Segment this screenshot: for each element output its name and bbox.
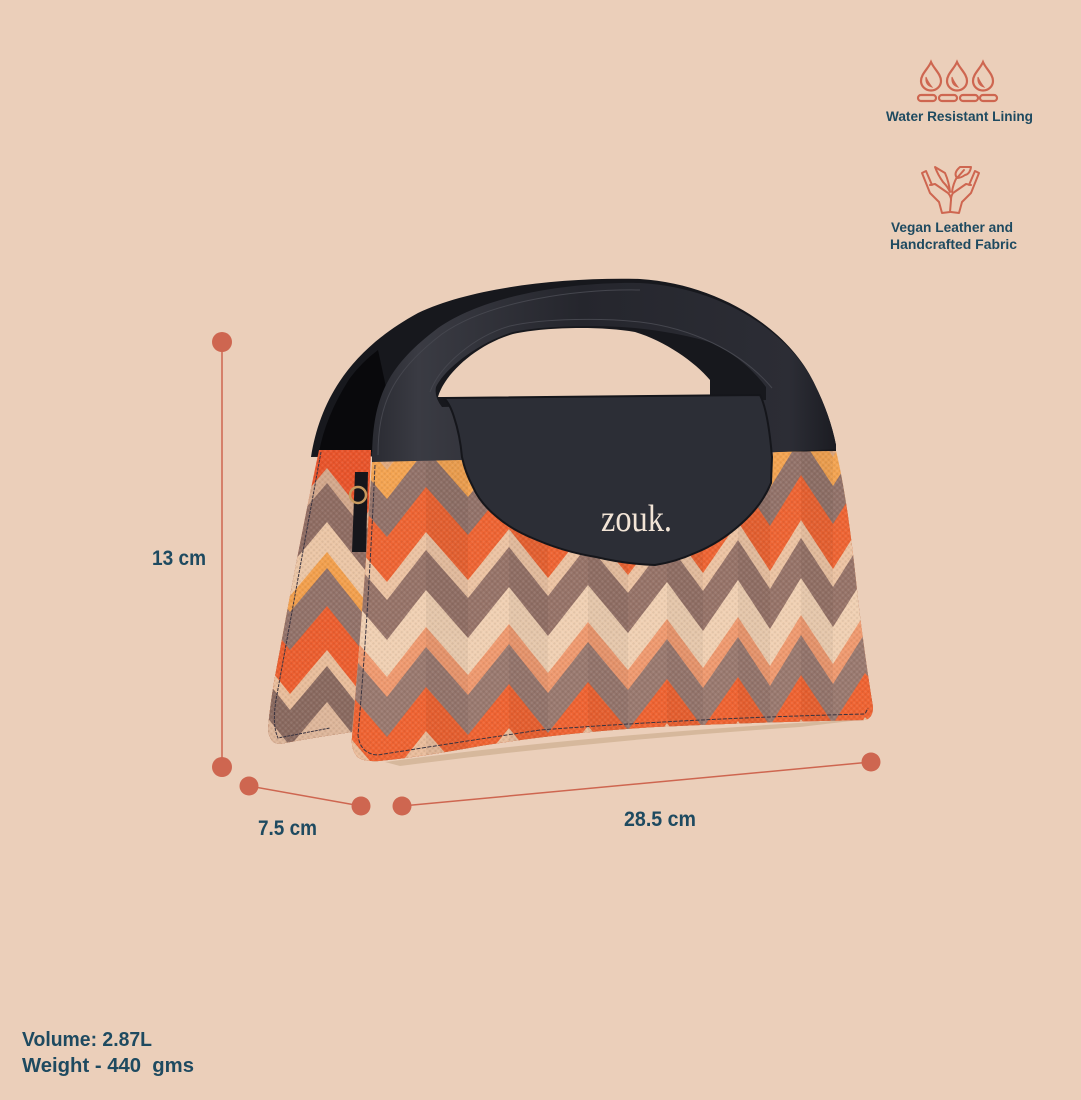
back handle [311,279,836,457]
flap [444,395,772,565]
water resistant label: Water Resistant Lining [886,109,1033,124]
bag shadow [385,719,868,766]
handcrafted fabric label: Handcrafted Fabric [890,237,1018,252]
bag interior [319,350,400,452]
depth dimension [240,776,370,816]
chevron facet shading [426,440,833,770]
side seam [274,452,330,738]
height dimension [212,332,232,777]
front handle [372,283,836,462]
weight text: Weight - 440 gms [22,1054,194,1077]
volume text: Volume: 2.87L [22,1028,152,1051]
product photo: handbag [268,278,873,766]
front seam [358,465,868,755]
icon: water resistant drops [918,62,997,101]
depth label: 7.5 cm [258,817,317,840]
height label: 13 cm [152,547,206,570]
side panel with chevrons [268,450,371,744]
icon: hands and leaves [922,167,979,213]
vegan leather label: Vegan Leather and [891,220,1013,235]
width label: 28.5 cm [624,808,696,831]
width dimension [392,752,880,816]
front panel with chevrons [352,451,873,762]
handle stitching [378,290,772,455]
brand logo: zouk. [601,498,672,540]
side strap and ring [350,472,368,552]
